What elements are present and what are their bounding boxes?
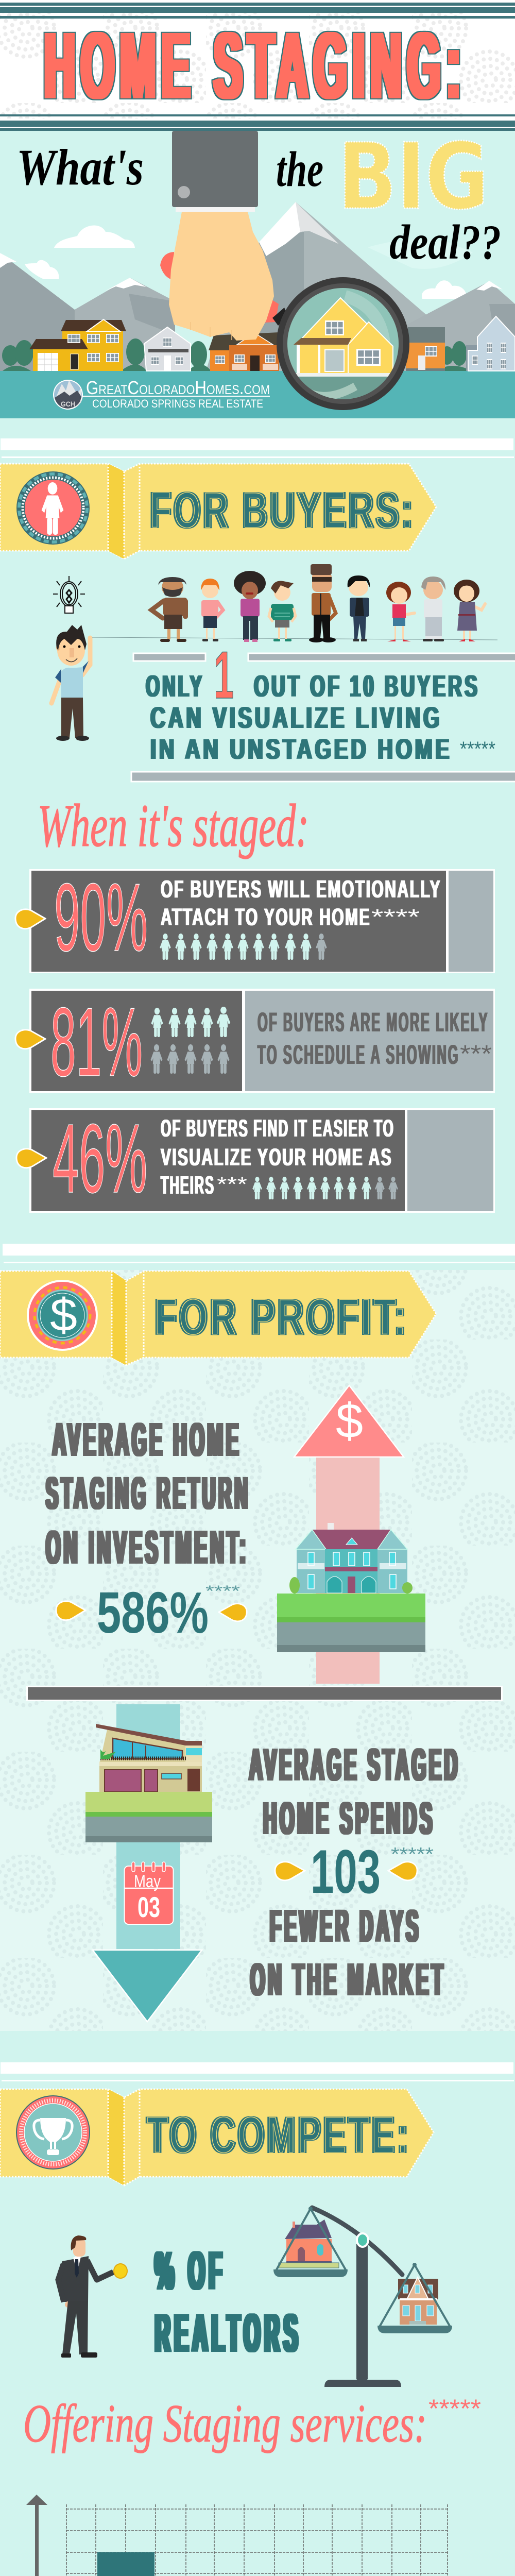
icon: trophy badge bbox=[16, 2095, 90, 2170]
subheading: when it's staged: When it's staged: bbox=[38, 792, 309, 859]
illustration: mountains and clouds bbox=[0, 202, 515, 371]
bar: 80 percent bbox=[97, 2552, 154, 2576]
person 2 bbox=[201, 579, 223, 641]
line: ground under people bbox=[92, 637, 497, 640]
divider bars around statistic bbox=[131, 653, 515, 782]
text: only 1 out of 10 buyers: ***** bbox=[460, 738, 495, 760]
illustration: businessman holding coin bbox=[58, 2235, 127, 2358]
left house bbox=[279, 2219, 339, 2268]
text: easier to visualize: VISUALIZE YOUR HOME AS bbox=[161, 1143, 392, 1171]
pictogram: people grid bbox=[150, 1007, 230, 1074]
text: AVERAGE HOME bbox=[53, 1414, 242, 1466]
person 6 bbox=[348, 575, 370, 641]
text: percent of realtors bbox=[155, 2241, 302, 2363]
person 5 bbox=[309, 564, 336, 642]
ground band bbox=[0, 371, 515, 418]
text: easier to visualize: THEIRS bbox=[161, 1172, 215, 1199]
stat: 103 fewer days: 103 bbox=[311, 1837, 381, 1906]
panel: 90 percent stat bbox=[15, 863, 495, 973]
icon: calendar: May bbox=[134, 1872, 161, 1891]
divider: dark bar bbox=[27, 1687, 502, 1700]
arrow: up with dollar bbox=[294, 1385, 404, 1684]
stat: 103 fewer days bbox=[275, 1837, 434, 1906]
panel: for buyers ribbon bbox=[0, 464, 436, 559]
subheading: offering staging services: ***** bbox=[428, 2394, 481, 2423]
person 4 bbox=[269, 581, 296, 641]
icon: person badge bbox=[16, 471, 90, 545]
illustration: man with raised arm bbox=[52, 625, 90, 741]
yellow house bbox=[29, 319, 126, 371]
magnifier handle grip bbox=[160, 252, 279, 323]
icon: drop bbox=[15, 1030, 45, 1049]
text: What's the BIG deal??: the bbox=[276, 142, 323, 197]
person 9 bbox=[454, 580, 485, 641]
logo: header: GCH bbox=[61, 400, 75, 408]
icon: calendar: 03 bbox=[138, 1891, 160, 1923]
panel: 81 percent stat bbox=[15, 988, 495, 1097]
stat: 586 percent: 586% bbox=[97, 1580, 209, 1645]
panel: header banner bbox=[0, 0, 515, 131]
text: What's the BIG deal?? bbox=[16, 124, 501, 269]
illustration: hand with suit cuff holding magnifier bbox=[160, 131, 279, 341]
panel: 46 percent stat bbox=[16, 1104, 495, 1213]
text: schedule a showing bbox=[258, 1007, 492, 1070]
arrow: down shaft bbox=[116, 1704, 180, 1949]
icon: lightbulb bbox=[53, 576, 85, 613]
panel: 46 percent stat: 46% bbox=[53, 1104, 147, 1213]
text: average home staging return bbox=[46, 1414, 251, 1573]
text: emotional attachment: ATTACH TO YOUR HOME bbox=[161, 903, 371, 930]
text: average staged home spends bbox=[249, 1740, 460, 2005]
logo: header: COLORADO SPRINGS REAL ESTATE bbox=[92, 397, 263, 410]
icon: dollar badge: $ bbox=[50, 1290, 77, 1341]
person 1 bbox=[151, 577, 188, 642]
text: emotional attachment bbox=[161, 876, 441, 930]
panel: 81 percent stat: 81% bbox=[50, 988, 143, 1097]
illustration: scale with two houses bbox=[273, 2207, 452, 2387]
illustration: street of houses bbox=[2, 316, 515, 371]
orange house bbox=[209, 332, 279, 371]
text: easier to visualize bbox=[161, 1114, 394, 1199]
logo: header bbox=[53, 377, 270, 410]
icon: drop bbox=[16, 1149, 46, 1168]
panel: to compete ribbon bbox=[0, 2089, 434, 2185]
y axis arrow bbox=[26, 2495, 47, 2576]
illustration: modern house on ground block bbox=[85, 1724, 212, 1842]
text: What's the BIG deal??: What's bbox=[16, 139, 144, 196]
icon: drop bbox=[15, 909, 45, 929]
icon: magnifying glass with house bbox=[272, 277, 409, 410]
person 7 bbox=[386, 582, 415, 641]
text: schedule a showing: *** bbox=[460, 1040, 492, 1067]
illustration: group of nine people bbox=[151, 564, 485, 642]
blue house bbox=[466, 316, 515, 371]
text: only 1 out of 10 buyers: 1 bbox=[214, 637, 234, 713]
bar chart bbox=[26, 2495, 448, 2576]
panel: 90 percent stat: 90% bbox=[54, 863, 148, 971]
text: What's the BIG deal??: BIG bbox=[338, 124, 489, 230]
arrow: down head bbox=[93, 1950, 202, 2022]
person 3 bbox=[234, 571, 266, 642]
heading: for profit: FOR PROFIT: bbox=[154, 1289, 408, 1345]
text: only 1 out of 10 buyers: ONLY bbox=[146, 669, 204, 703]
pictogram: 10 of 11 people bbox=[160, 934, 327, 960]
text: easier to visualize: *** bbox=[217, 1173, 247, 1196]
pictogram: people row bbox=[252, 1177, 398, 1199]
logo: header: GreatColoradoHomes.com bbox=[86, 377, 270, 398]
illustration: teal house on ground block bbox=[277, 1523, 425, 1652]
right orange house bbox=[406, 327, 445, 371]
person 8 bbox=[421, 577, 445, 641]
text: only 1 out of 10 buyers bbox=[146, 637, 495, 765]
text: percent of realtors: % OF bbox=[155, 2241, 226, 2301]
panel: for profit ribbon bbox=[0, 1271, 436, 1365]
icon: calendar bbox=[125, 1862, 173, 1924]
arrow: up with dollar: $ bbox=[336, 1394, 363, 1448]
icon: dollar badge bbox=[27, 1280, 98, 1351]
panel: for profit background bbox=[0, 1270, 515, 2031]
text: emotional attachment: **** bbox=[371, 905, 420, 929]
grid bbox=[62, 2504, 448, 2576]
stat: 586 percent: **** bbox=[205, 1583, 240, 1600]
right house bbox=[398, 2277, 438, 2325]
stat: 103 fewer days: ***** bbox=[391, 1843, 434, 1865]
grey house bbox=[144, 327, 191, 371]
